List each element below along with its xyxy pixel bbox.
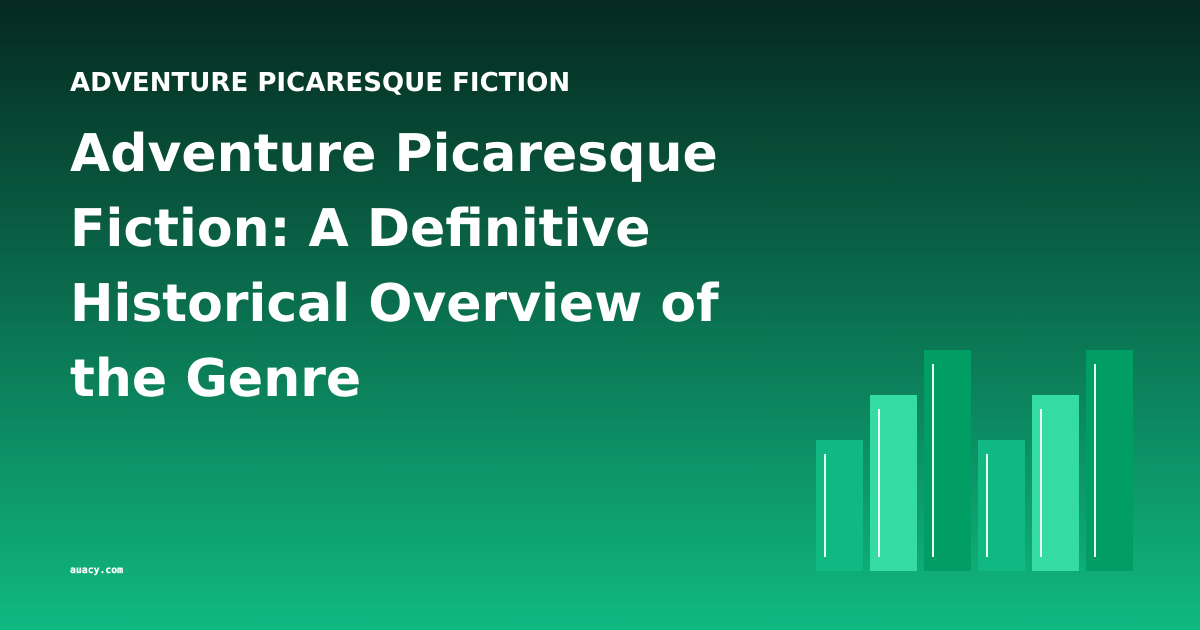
title: Fiction: A Definitive — [70, 199, 651, 259]
eyebrow heading: ADVENTURE PICARESQUE FICTION — [70, 68, 570, 98]
domain label: auacy.com — [70, 565, 123, 576]
title: the Genre — [70, 349, 361, 409]
title: Historical Overview of — [70, 274, 719, 334]
title — [70, 124, 720, 409]
title: Adventure Picaresque — [70, 124, 718, 184]
